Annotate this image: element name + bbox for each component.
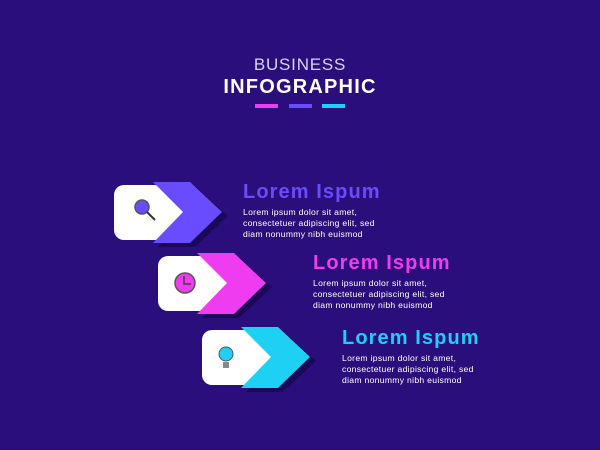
text: step 1: diam nonummy nibh euismod — [243, 229, 363, 239]
title — [223, 55, 377, 98]
text: step 3: Lorem Ispum — [342, 327, 480, 349]
text: step 3: consectetuer adipiscing elit, sed — [342, 364, 474, 374]
icon: light bulb — [219, 347, 233, 368]
text: step 1: Lorem Ispum — [243, 181, 381, 203]
text: step 2: Lorem ipsum dolor sit amet, — [313, 278, 427, 288]
icon: magnifier — [135, 200, 155, 220]
text: step 1 — [243, 181, 381, 239]
text: step 2: diam nonummy nibh euismod — [313, 300, 433, 310]
text: step 2: consectetuer adipiscing elit, sed — [313, 289, 445, 299]
text: step 3: diam nonummy nibh euismod — [342, 375, 462, 385]
text: step 3: Lorem ipsum dolor sit amet, — [342, 353, 456, 363]
text: step 2: Lorem Ispum — [313, 252, 451, 274]
text: step 3 — [342, 327, 480, 385]
icon: clock — [175, 273, 195, 293]
text: step 1: Lorem ipsum dolor sit amet, — [243, 207, 357, 217]
title: BUSINESS — [254, 55, 346, 74]
text: step 2 — [313, 252, 451, 310]
title: INFOGRAPHIC — [223, 76, 377, 98]
text: step 1: consectetuer adipiscing elit, sed — [243, 218, 375, 228]
